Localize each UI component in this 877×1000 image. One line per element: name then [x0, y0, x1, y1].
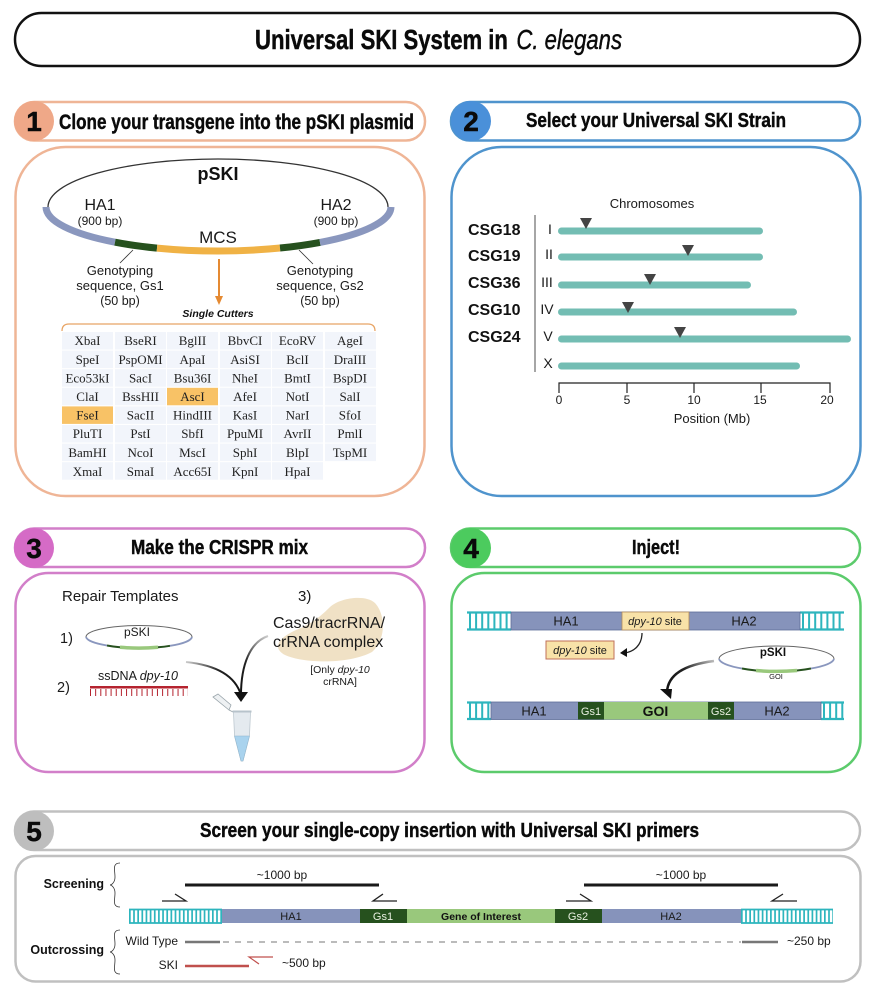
- edited locus: HA1: [521, 704, 547, 718]
- restriction enzyme table: BlpI: [286, 445, 309, 460]
- heading: single cutters: Single Cutters: [182, 308, 254, 320]
- pSKI plasmid map: Genotyping: [287, 263, 353, 278]
- restriction enzyme table: FseI: [76, 408, 99, 422]
- bracket: [62, 324, 375, 331]
- pSKI plasmid map: HA2: [320, 197, 352, 214]
- step 5 heading: 5: [26, 816, 42, 847]
- restriction enzyme table: AscI: [180, 389, 205, 404]
- chromosome chart: Chromosomes: [610, 196, 695, 211]
- restriction enzyme table: BamHI: [68, 445, 107, 460]
- pSKI small plasmid: pSKI: [124, 625, 150, 639]
- restriction enzyme table: BmtI: [284, 370, 311, 386]
- restriction enzyme table: PluTI: [73, 426, 102, 441]
- restriction enzyme table: SacII: [127, 408, 154, 422]
- panel: clone into pSKI: [16, 147, 424, 496]
- step 1 heading: Clone your transgene into the pSKI plasmid: [59, 111, 414, 134]
- arrow: MCS to single cutters: [215, 259, 223, 305]
- chromosome chart: CSG24: [468, 329, 521, 346]
- pSKI plasmid map: sequence, Gs1: [76, 278, 164, 293]
- title: [15, 13, 860, 66]
- excised dpy-10 site: [546, 641, 614, 659]
- step 5 heading: [14, 811, 860, 851]
- icon: microcentrifuge tube: [213, 694, 252, 761]
- chromosome chart: III: [541, 274, 553, 290]
- right amplicon: [566, 868, 797, 901]
- arrows into tube: [186, 636, 268, 702]
- pSKI plasmid map: MCS: [199, 228, 237, 247]
- pSKI plasmid map: sequence, Gs2: [276, 278, 364, 293]
- target locus: HA1: [553, 614, 579, 628]
- restriction enzyme table: XbaI: [74, 333, 100, 348]
- restriction enzyme table: BspDI: [333, 370, 367, 386]
- insertion locus: Gs1: [373, 911, 393, 923]
- screening label: Screening: [44, 877, 104, 891]
- insertion locus: Gene of Interest: [441, 911, 521, 923]
- arrow: insert GOI: [660, 661, 714, 699]
- pSKI small plasmid: [60, 625, 192, 648]
- chromosome chart: 20: [820, 393, 834, 407]
- screening label: [44, 863, 120, 907]
- step 2 heading: 2: [463, 106, 479, 137]
- restriction enzyme table: SbfI: [181, 426, 204, 441]
- restriction enzyme table: BbvCI: [228, 333, 262, 348]
- restriction enzyme table: PpuMI: [227, 426, 263, 441]
- restriction enzyme table: PstI: [130, 426, 151, 441]
- restriction enzyme table: AfeI: [233, 389, 257, 404]
- panel: strain chart: [452, 147, 860, 496]
- title: Universal SKI System in C. elegans: [255, 24, 622, 55]
- left amplicon: ~1000 bp: [257, 868, 308, 882]
- pSKI small plasmid: 1): [60, 631, 73, 647]
- chromosome chart: CSG18: [468, 222, 521, 239]
- chromosome chart: II: [545, 246, 553, 262]
- chromosome chart: I: [548, 221, 552, 237]
- pSKI plasmid map: (50 bp): [100, 294, 140, 308]
- Cas9 complex: crRNA]: [323, 676, 357, 688]
- Cas9 complex: [273, 588, 386, 688]
- restriction enzyme table: SalI: [340, 389, 360, 404]
- target locus: [467, 612, 844, 630]
- target locus: HA2: [731, 614, 757, 628]
- edited locus: GOI: [643, 703, 668, 719]
- SKI band: [159, 956, 326, 972]
- wild type band: [126, 934, 831, 948]
- edited locus: Gs1: [581, 706, 601, 718]
- edited locus: HA2: [764, 704, 790, 718]
- pSKI donor plasmid: pSKI: [760, 647, 786, 659]
- restriction enzyme table: SmaI: [127, 464, 154, 479]
- restriction enzyme table: XmaI: [73, 464, 102, 479]
- restriction enzyme table: BglII: [179, 333, 206, 348]
- restriction enzyme table: KasI: [233, 408, 257, 422]
- arrow: site removed: [620, 633, 642, 657]
- restriction enzyme table: BssHII: [122, 389, 159, 404]
- chromosome chart: [468, 196, 851, 426]
- restriction enzyme table: Bsu36I: [174, 370, 211, 386]
- restriction enzyme table: [62, 332, 376, 480]
- step 4 heading: 4: [463, 533, 479, 564]
- left amplicon: [162, 868, 397, 901]
- excised dpy-10 site: dpy-10 site: [553, 645, 607, 657]
- insertion locus: HA2: [660, 911, 682, 923]
- chromosome chart: 0: [556, 393, 563, 407]
- restriction enzyme table: ClaI: [76, 389, 99, 404]
- step 4 heading: [451, 528, 860, 568]
- chromosome chart: X: [543, 355, 553, 371]
- restriction enzyme table: Acc65I: [173, 464, 212, 479]
- step 3 heading: Make the CRISPR mix: [131, 537, 308, 559]
- insertion locus: [129, 909, 833, 923]
- restriction enzyme table: AgeI: [337, 333, 363, 348]
- ssDNA dpy-10: ssDNA dpy-10: [98, 669, 178, 683]
- Cas9 complex: crRNA complex: [273, 634, 383, 651]
- restriction enzyme table: HindIII: [173, 408, 212, 422]
- ssDNA dpy-10: 2): [57, 680, 70, 696]
- ssDNA dpy-10: [57, 669, 188, 696]
- pSKI plasmid map: (900 bp): [78, 214, 122, 228]
- chromosome chart: V: [543, 328, 553, 344]
- chromosome chart: CSG36: [468, 275, 521, 292]
- pSKI plasmid map: pSKI: [197, 164, 239, 184]
- restriction enzyme table: PspOMI: [118, 352, 163, 367]
- step 2 heading: [451, 101, 860, 141]
- restriction enzyme table: BclI: [286, 352, 309, 367]
- step 1 heading: [14, 101, 425, 141]
- restriction enzyme table: AsiSI: [230, 352, 260, 367]
- wild type band: Wild Type: [126, 934, 178, 948]
- restriction enzyme table: NheI: [232, 370, 258, 386]
- insertion locus: HA1: [280, 911, 302, 923]
- panel: CRISPR mix: [16, 573, 424, 772]
- outcrossing label: [30, 930, 120, 974]
- restriction enzyme table: MscI: [179, 445, 206, 460]
- panel: inject: [452, 573, 860, 772]
- repair templates heading: Repair Templates: [62, 588, 178, 605]
- insertion locus: Gs2: [568, 911, 588, 923]
- restriction enzyme table: DraIII: [334, 352, 366, 367]
- Cas9 complex: 3): [298, 588, 311, 605]
- wild type band: ~250 bp: [787, 934, 831, 948]
- restriction enzyme table: HpaI: [284, 464, 310, 479]
- edited locus: Gs2: [711, 706, 731, 718]
- restriction enzyme table: SacI: [129, 370, 152, 386]
- step 5 heading: Screen your single-copy insertion with Universal SKI primers: [200, 820, 699, 842]
- restriction enzyme table: TspMI: [333, 445, 367, 460]
- chromosome chart: CSG10: [468, 302, 521, 319]
- restriction enzyme table: SphI: [233, 445, 257, 460]
- step 4 heading: Inject!: [632, 537, 680, 559]
- restriction enzyme table: AvrII: [284, 426, 311, 441]
- target locus: dpy-10 site: [628, 616, 682, 628]
- pSKI plasmid map: Genotyping: [87, 263, 153, 278]
- Cas9 complex: [Only dpy-10: [310, 664, 370, 676]
- chromosome chart: 10: [687, 393, 701, 407]
- step 3 heading: 3: [26, 533, 42, 564]
- step 2 heading: Select your Universal SKI Strain: [526, 110, 786, 132]
- restriction enzyme table: NcoI: [128, 445, 154, 460]
- pSKI plasmid map: HA1: [84, 197, 116, 214]
- restriction enzyme table: KpnI: [232, 464, 258, 479]
- pSKI plasmid map: [46, 159, 391, 308]
- restriction enzyme table: PmlI: [337, 426, 363, 441]
- chromosome chart: IV: [540, 301, 554, 317]
- restriction enzyme table: BseRI: [124, 333, 157, 348]
- restriction enzyme table: ApaI: [180, 352, 206, 367]
- panel: screening: [16, 856, 860, 982]
- outcrossing label: Outcrossing: [30, 943, 104, 957]
- restriction enzyme table: NarI: [286, 408, 309, 422]
- restriction enzyme table: NotI: [286, 389, 309, 404]
- pSKI plasmid map: (50 bp): [300, 294, 340, 308]
- Cas9 complex: Cas9/tracrRNA/: [273, 615, 386, 632]
- restriction enzyme table: SpeI: [76, 352, 99, 367]
- chromosome chart: CSG19: [468, 248, 521, 265]
- pSKI donor plasmid: GOI: [769, 672, 783, 681]
- SKI band: ~500 bp: [282, 956, 326, 970]
- right amplicon: ~1000 bp: [656, 868, 707, 882]
- step 3 heading: [14, 528, 425, 568]
- SKI band: SKI: [159, 958, 178, 972]
- restriction enzyme table: EcoRV: [279, 333, 317, 348]
- chromosome chart: 15: [753, 393, 767, 407]
- step 1 heading: 1: [26, 106, 42, 137]
- chromosome chart: 5: [624, 393, 631, 407]
- restriction enzyme table: Eco53kI: [65, 370, 110, 386]
- pSKI donor plasmid: [719, 646, 834, 681]
- pSKI plasmid map: (900 bp): [314, 214, 358, 228]
- chromosome chart: Position (Mb): [674, 411, 750, 426]
- edited locus: [467, 702, 844, 720]
- restriction enzyme table: SfoI: [339, 408, 361, 422]
